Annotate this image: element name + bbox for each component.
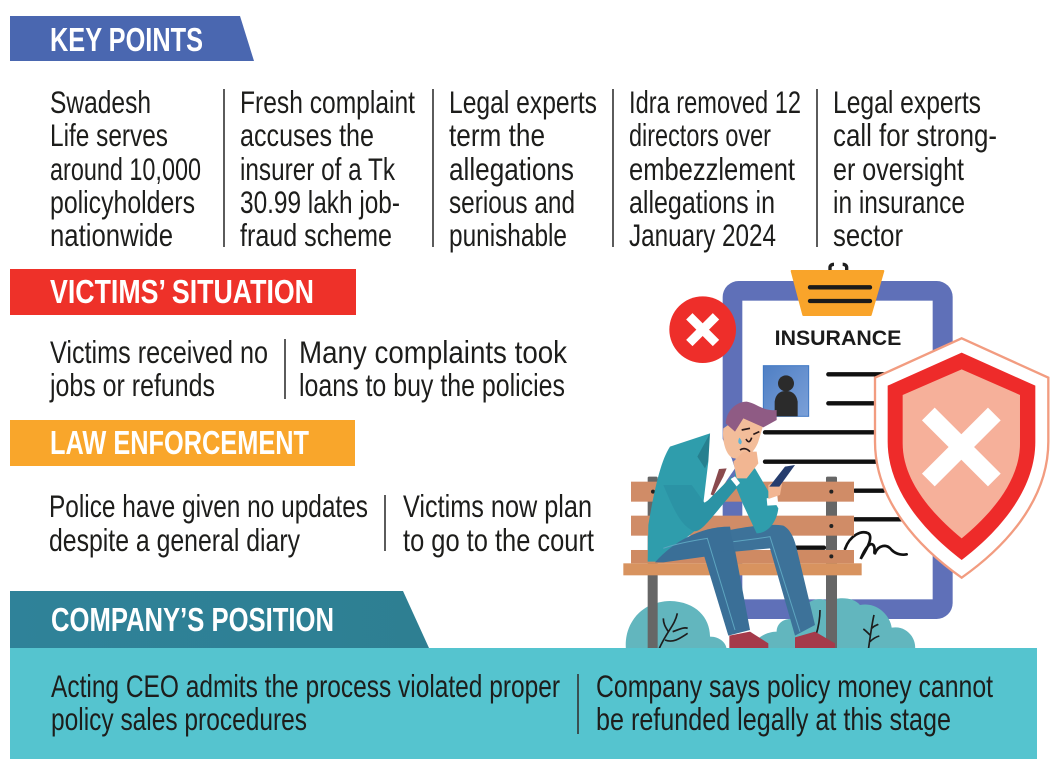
key point 2 <box>240 84 415 253</box>
law enforcement text 1: Police have given no updates <box>49 488 368 524</box>
clipboard with insurance form <box>723 264 953 619</box>
key point 5: in insurance <box>833 184 965 220</box>
company text 2: be refunded legally at this stage <box>596 701 951 737</box>
banner: victims' situation <box>10 269 356 315</box>
banner: company's position: COMPANY’S POSITION <box>51 601 334 638</box>
banner: law enforcement: LAW ENFORCEMENT <box>50 424 309 461</box>
banner: company's position <box>10 591 429 648</box>
key point 1: around 10,000 <box>50 151 201 187</box>
law enforcement text 2: to go to the court <box>403 522 594 558</box>
key point 3: punishable <box>449 217 567 253</box>
banner: key points <box>10 16 254 61</box>
key point 5: er oversight <box>833 151 964 187</box>
law enforcement text 2: Victims now plan <box>403 488 592 524</box>
key point 5: call for strong- <box>833 117 997 153</box>
company text 1 <box>51 668 560 737</box>
banner: law enforcement <box>10 420 355 466</box>
banner: key points: KEY POINTS <box>50 21 203 58</box>
key point 2: accuses the <box>240 117 374 153</box>
bench <box>623 477 862 650</box>
bushes <box>626 598 915 650</box>
key point 4: January 2024 <box>629 217 776 253</box>
key point 3: serious and <box>449 184 575 220</box>
clipboard with insurance form: INSURANCE <box>775 326 901 350</box>
company text 1: Acting CEO admits the process violated proper <box>51 668 560 704</box>
victims text 1: jobs or refunds <box>49 367 215 403</box>
key point 2: fraud scheme <box>240 217 392 253</box>
icon: red circle with cross <box>669 296 736 363</box>
key point 4: Idra removed 12 <box>629 84 801 120</box>
key point 5 <box>833 84 997 253</box>
company text 1: policy sales procedures <box>51 701 307 737</box>
key point 1: nationwide <box>50 217 173 253</box>
victims text 2: Many complaints took <box>299 334 567 370</box>
key point 4: directors over <box>629 117 771 153</box>
law enforcement text 2 <box>403 488 594 558</box>
key point 1: Swadesh <box>50 84 151 120</box>
illustration: insurance claim rejected, sad man on a bench <box>623 264 1048 650</box>
key point 3 <box>449 84 597 253</box>
key point 1: Life serves <box>50 117 168 153</box>
icon: red shield with cross <box>875 338 1048 578</box>
company text 2 <box>596 668 993 737</box>
key point 5: sector <box>833 217 903 253</box>
key point 4: embezzlement <box>629 151 795 187</box>
key point 4: allegations in <box>629 184 775 220</box>
banner: victims' situation: VICTIMS’ SITUATION <box>50 273 314 310</box>
key point 2: insurer of a Tk <box>240 151 395 187</box>
key point 4 <box>629 84 801 253</box>
law enforcement text 1: despite a general diary <box>49 522 300 558</box>
key point 2: 30.99 lakh job- <box>240 184 400 220</box>
key point 3: term the <box>449 117 545 153</box>
victims text 2: loans to buy the policies <box>299 367 565 403</box>
key point 2: Fresh complaint <box>240 84 415 120</box>
panel: company's position text background <box>10 648 1037 759</box>
key point 5: Legal experts <box>833 84 981 120</box>
key point 1 <box>50 84 201 253</box>
key point 3: Legal experts <box>449 84 597 120</box>
key point 3: allegations <box>449 151 574 187</box>
victims text 2 <box>299 334 567 403</box>
victims text 1 <box>49 334 268 403</box>
key point 1: policyholders <box>50 184 195 220</box>
victims text 1: Victims received no <box>50 334 268 370</box>
sad man looking at phone <box>648 402 835 650</box>
law enforcement text 1 <box>49 488 368 558</box>
